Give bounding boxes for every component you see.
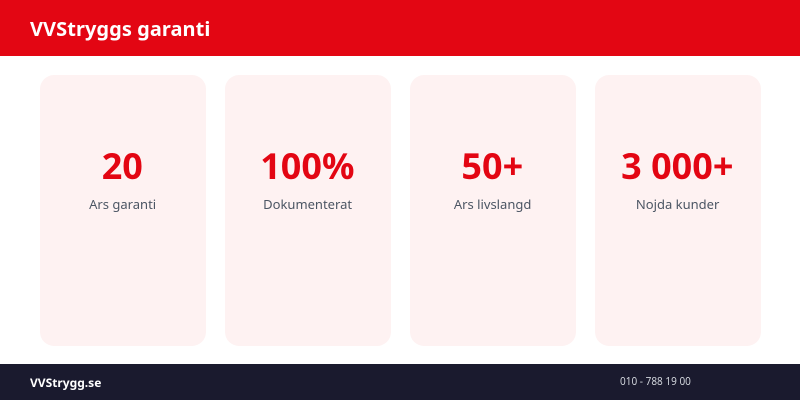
stat label: Dokumenterat: [263, 195, 352, 213]
title: VVStryggs garanti: [30, 15, 210, 42]
stat label: Ars garanti: [89, 195, 156, 213]
panel: 3 000+ satisfied customers: [595, 75, 761, 346]
stat number: 3 000+: [621, 141, 733, 190]
stat number: 50+: [461, 141, 523, 190]
header band: [0, 0, 800, 56]
stat number: 20: [102, 141, 143, 190]
panel: 20 years warranty: [40, 75, 206, 346]
panel: 50+ years lifespan: [410, 75, 576, 346]
stat number: 100%: [260, 141, 354, 190]
stat label: Nojda kunder: [636, 195, 719, 213]
stat label: Ars livslangd: [454, 195, 531, 213]
footer brand: VVStrygg.se: [30, 374, 101, 391]
panel: 100% documented: [225, 75, 391, 346]
footer band: [0, 364, 800, 400]
footer phone number: 010 - 788 19 00: [620, 374, 691, 389]
